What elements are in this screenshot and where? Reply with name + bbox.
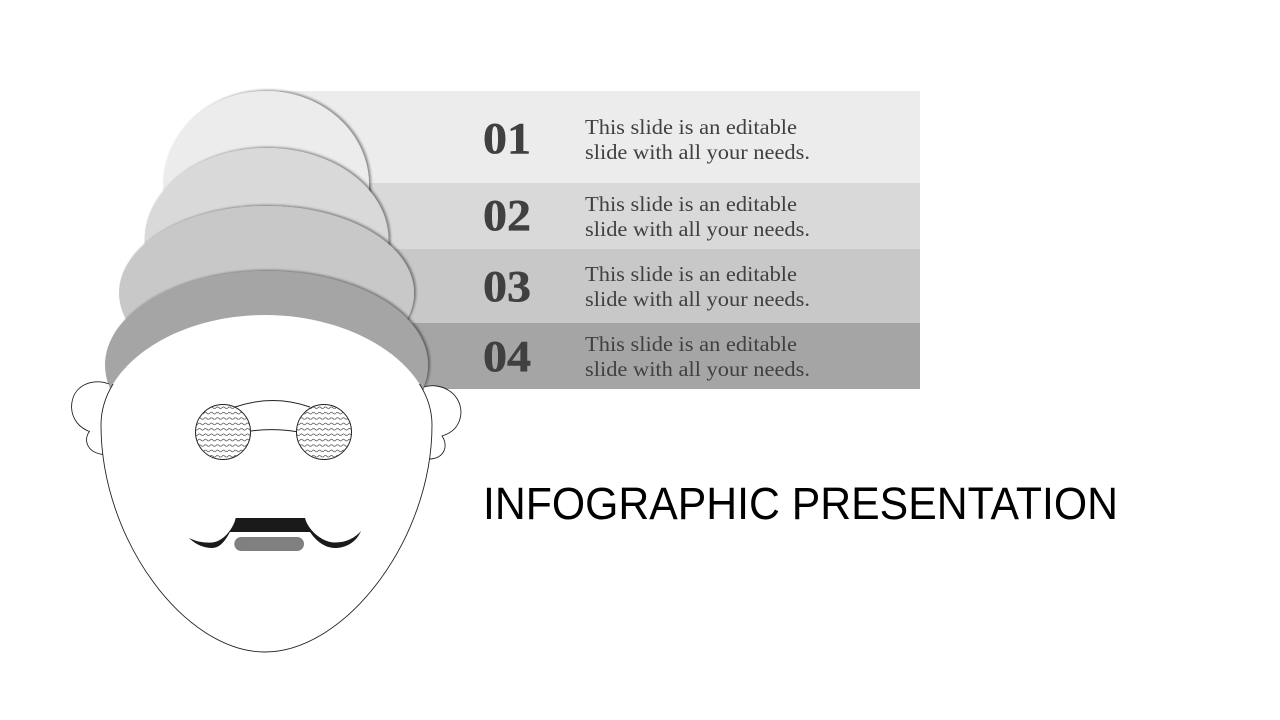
number 01: 01 (483, 114, 531, 163)
number 03: 03 (483, 262, 531, 311)
panel: band 2 (280, 183, 920, 249)
text block 3: slide with all your needs. (585, 287, 810, 311)
hat layer 1 (163, 91, 369, 279)
hat layer 2 (144, 148, 388, 332)
panel: band 3 (280, 249, 920, 323)
panel: band 1 (280, 91, 920, 183)
text block 2: slide with all your needs. (585, 217, 810, 241)
text block 2: This slide is an editable (585, 192, 797, 216)
face fill (101, 315, 432, 652)
text block 1: This slide is an editable (585, 115, 797, 139)
number 04: 04 (483, 332, 531, 381)
hat layer 4 (105, 271, 428, 459)
icon: moustache (189, 518, 361, 548)
icon: right ear (424, 386, 461, 459)
number 02: 02 (483, 191, 531, 240)
hat layer 3 (119, 206, 414, 380)
title: INFOGRAPHIC PRESENTATION (483, 478, 1118, 529)
infographic slide (71, 88, 1114, 652)
icon: glasses (196, 400, 352, 460)
text block 3: This slide is an editable (585, 262, 797, 286)
text block 1: slide with all your needs. (585, 140, 810, 164)
icon: left ear (72, 382, 109, 454)
face outline (100, 384, 432, 652)
icon: mouth (234, 537, 304, 551)
text block 4: slide with all your needs. (585, 357, 810, 381)
panel: band 4 (280, 323, 920, 389)
text block 4: This slide is an editable (585, 332, 797, 356)
